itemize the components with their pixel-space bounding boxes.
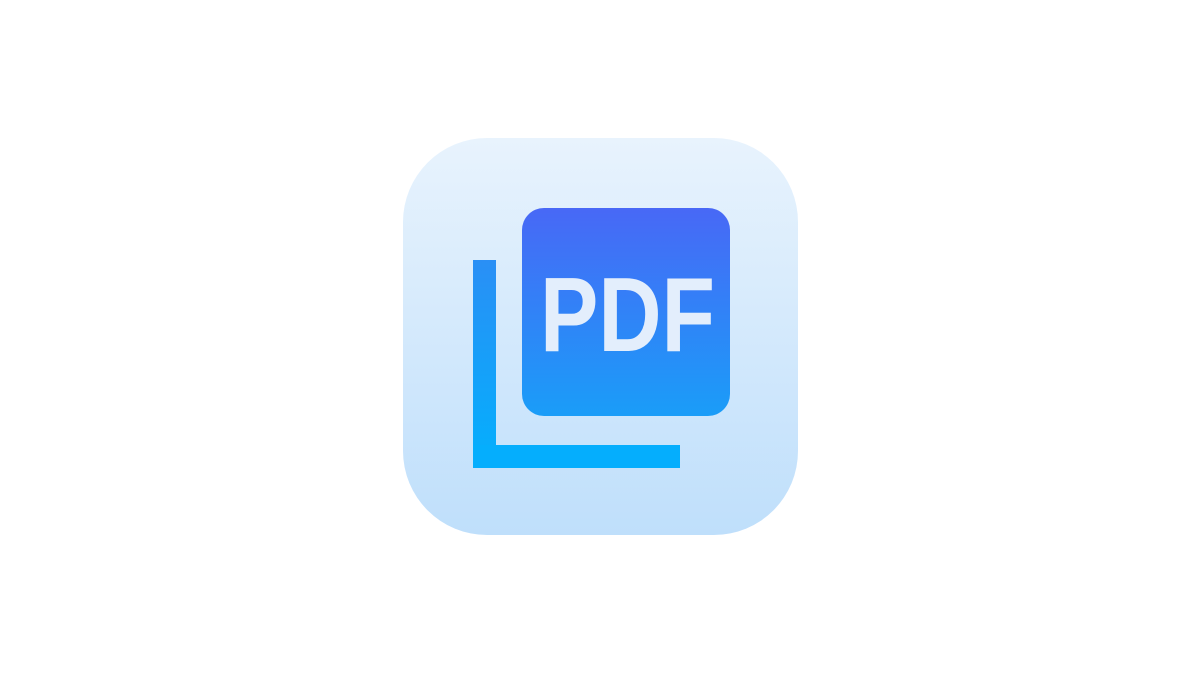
L-shaped bracket xyxy=(473,260,680,468)
icon background tile xyxy=(403,138,798,535)
PDF label: PDF xyxy=(540,256,715,374)
blue document square xyxy=(522,208,730,416)
